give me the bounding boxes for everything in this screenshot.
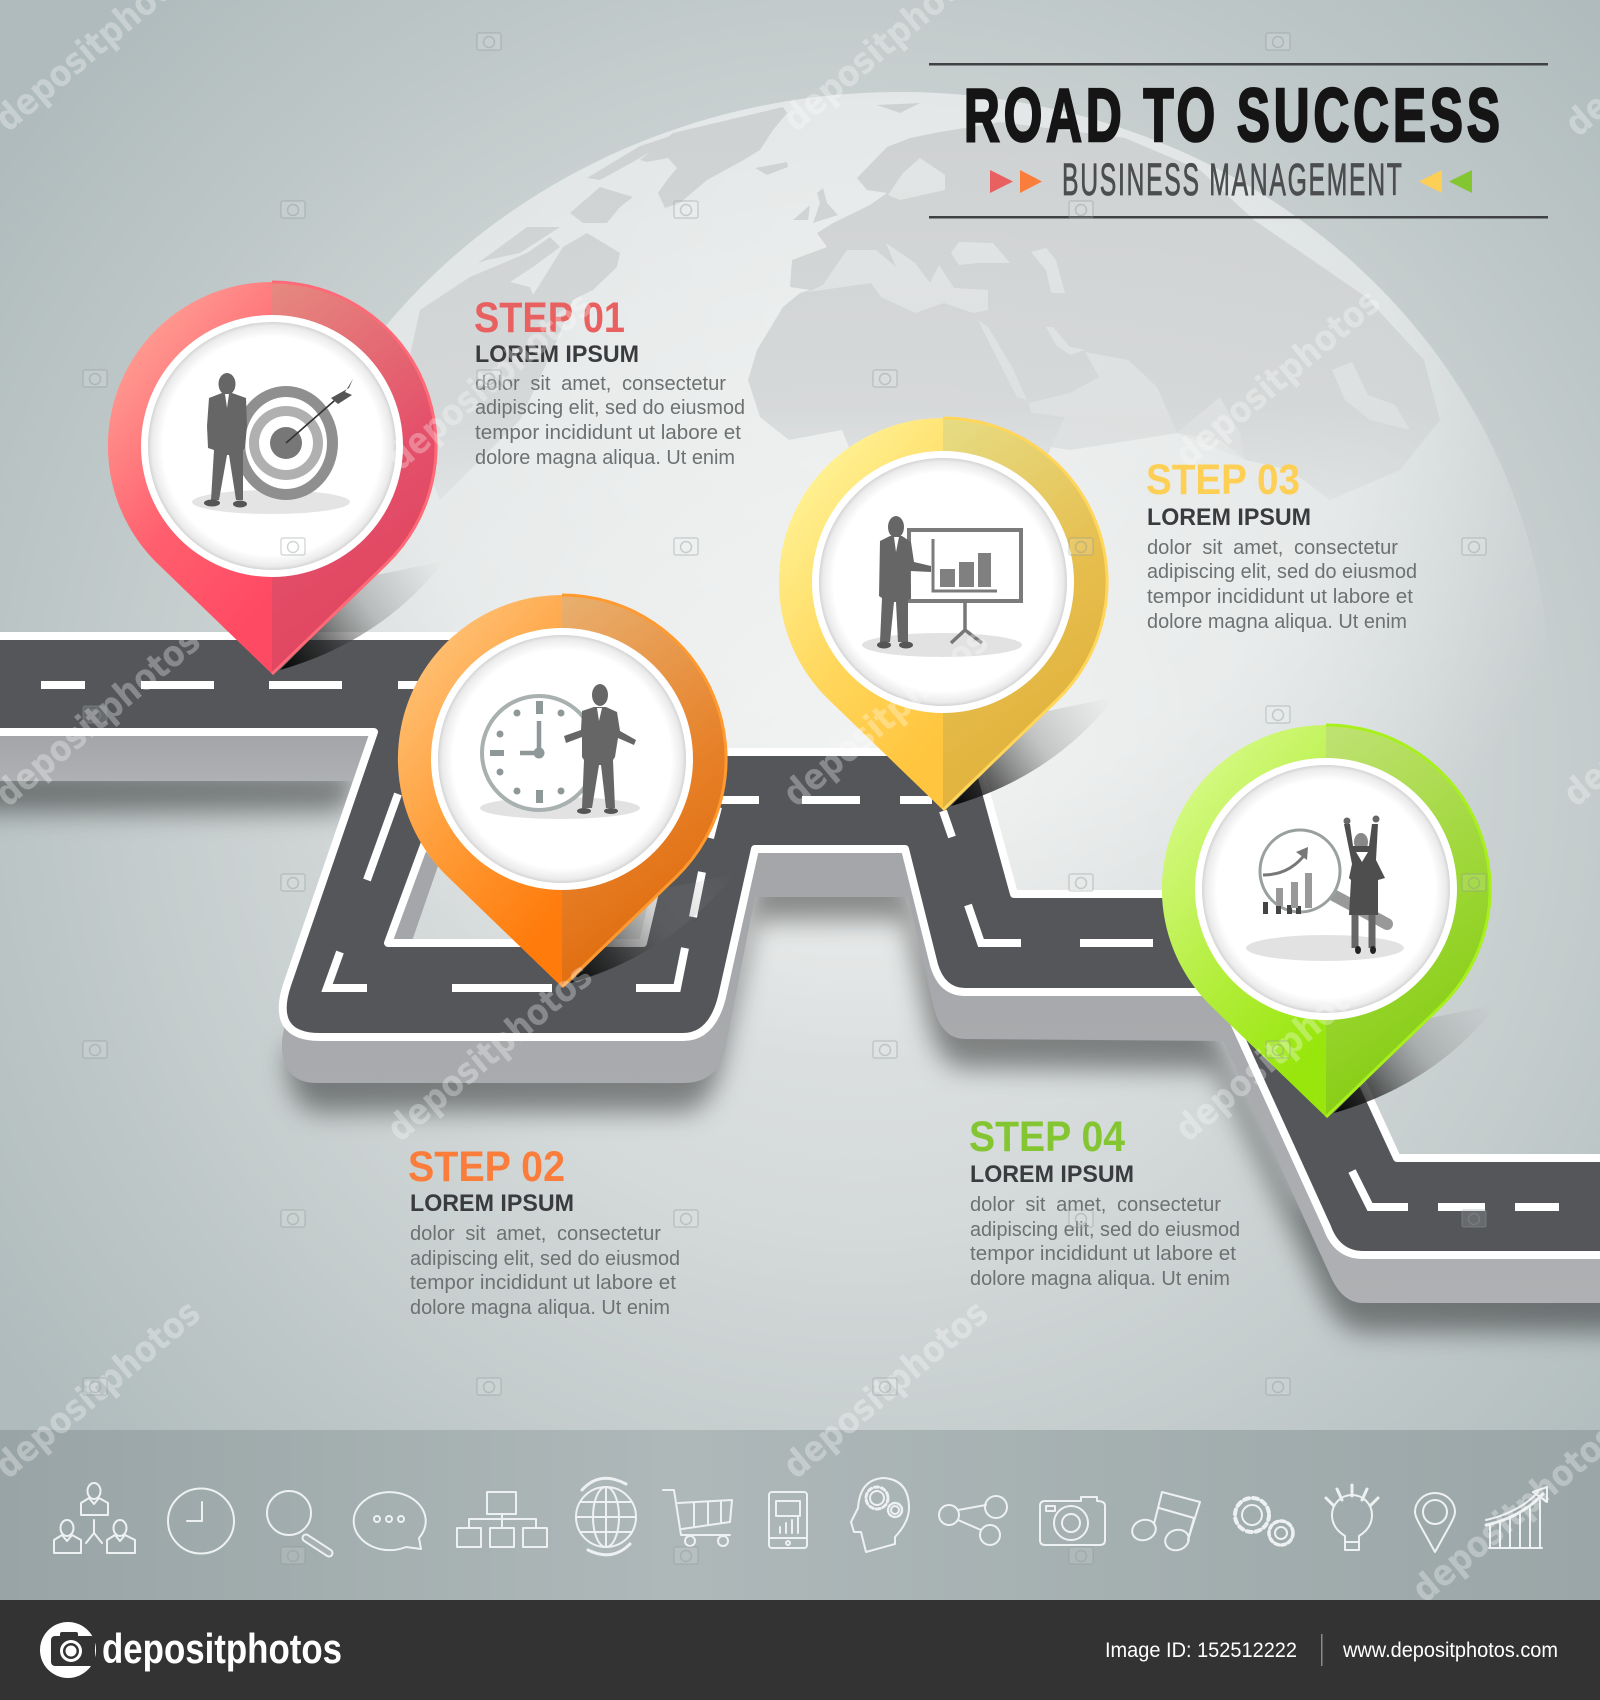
footer logo: depositphotos: [102, 1625, 342, 1672]
step 03 text: tempor incididunt ut labore et: [1147, 586, 1413, 608]
step 01 text: STEP 01: [474, 294, 625, 342]
step 04 text: [969, 1113, 1240, 1290]
road: [0, 636, 1600, 1332]
step 02 text: [408, 1143, 680, 1319]
step 03 text: STEP 03: [1146, 456, 1300, 504]
icon: share: [939, 1496, 1007, 1545]
icon: clock: [168, 1488, 234, 1554]
step 01 text: LOREM IPSUM: [475, 341, 639, 368]
lane markings: [41, 685, 1559, 1207]
continents: [400, 103, 1440, 560]
step 04 text: dolor sit amet, consectetur: [970, 1194, 1221, 1216]
title block: [929, 63, 1548, 218]
road drop shadow: [0, 770, 1600, 1332]
step 02 text: dolore magna aliqua. Ut enim: [410, 1297, 670, 1319]
step 04 text: adipiscing elit, sed do eiusmod: [970, 1219, 1240, 1241]
step 04 text: STEP 04: [969, 1113, 1125, 1161]
footer logo: [40, 1622, 342, 1678]
step 03 text: dolore magna aliqua. Ut enim: [1147, 611, 1407, 633]
icon: team: [54, 1483, 135, 1553]
website: www.depositphotos.com: [1342, 1639, 1558, 1662]
icon: woman with magnified chart: [1246, 816, 1404, 961]
icon: globe: [576, 1478, 636, 1555]
pin 2: orange, clock: [398, 595, 734, 987]
step 02 text: LOREM IPSUM: [410, 1190, 574, 1217]
step 02 text: STEP 02: [408, 1143, 565, 1191]
watermarks: depositphotos: [775, 1292, 996, 1487]
pin body: [108, 282, 436, 674]
step 03 text: [1146, 456, 1417, 633]
icon: speech bubble: [354, 1492, 426, 1550]
step 02 text: tempor incididunt ut labore et: [410, 1272, 676, 1294]
pin 1: red, target: [108, 282, 444, 674]
step 03 text: adipiscing elit, sed do eiusmod: [1147, 561, 1417, 583]
watermarks: depositphotos: [379, 284, 600, 479]
world globe: [250, 92, 1550, 1296]
pin 3: yellow, presentation: [779, 418, 1115, 810]
icon: cart: [663, 1490, 732, 1546]
road inner wall: [392, 848, 438, 941]
icon: growth chart: [1486, 1487, 1547, 1548]
step 02 text: adipiscing elit, sed do eiusmod: [410, 1248, 680, 1270]
step 04 text: LOREM IPSUM: [970, 1161, 1134, 1188]
subtitle: BUSINESS MANAGEMENT: [1062, 154, 1402, 205]
pin shadow: [570, 874, 734, 983]
footer bar: [0, 1600, 1600, 1700]
image id: Image ID: 152512222: [1105, 1639, 1297, 1662]
road side wall: [0, 732, 374, 781]
step 01 text: adipiscing elit, sed do eiusmod: [475, 397, 745, 419]
bottom icon band: [0, 1430, 1600, 1600]
icon: music: [1129, 1492, 1200, 1554]
step 03 text: LOREM IPSUM: [1147, 504, 1311, 531]
watermarks: depositphotos: [775, 620, 996, 815]
icon: man with chart board: [862, 516, 1022, 657]
watermarks: depositphotos: [379, 955, 600, 1150]
pin body: [779, 418, 1107, 810]
step 04 text: tempor incididunt ut labore et: [970, 1243, 1236, 1265]
watermarks: depositphotos: [1167, 281, 1388, 476]
road surface: [0, 636, 1600, 1255]
icon: tablet: [769, 1492, 807, 1548]
watermarks: depositphotos: [1167, 955, 1388, 1150]
icon: light bulb: [1326, 1485, 1378, 1550]
pin body: [398, 595, 726, 987]
title: ROAD TO SUCCESS: [964, 74, 1500, 158]
step 01 text: dolore magna aliqua. Ut enim: [475, 447, 735, 469]
step 04 text: dolore magna aliqua. Ut enim: [970, 1268, 1230, 1290]
icon: man with clock: [480, 684, 640, 819]
icon: head with gears: [851, 1478, 909, 1552]
icon: man with target: [192, 373, 353, 514]
step 01 text: dolor sit amet, consectetur: [475, 373, 726, 395]
seas: [808, 158, 1410, 460]
step 01 text: [474, 294, 745, 469]
step 01 text: tempor incididunt ut labore et: [475, 422, 741, 444]
icon: search: [267, 1491, 329, 1553]
step 03 text: dolor sit amet, consectetur: [1147, 537, 1398, 559]
pin shadow: [951, 697, 1115, 806]
pin 4: green, growth: [1162, 725, 1498, 1117]
pin shadow: [1334, 1004, 1498, 1113]
icon: org chart: [457, 1492, 547, 1547]
icon: gears: [1235, 1498, 1293, 1545]
icon: location pin: [1415, 1493, 1455, 1552]
step 02 text: dolor sit amet, consectetur: [410, 1223, 661, 1245]
arrows: [990, 170, 1472, 193]
icon: camera: [1040, 1497, 1105, 1545]
pin body: [1162, 725, 1490, 1117]
pin shadow: [280, 561, 444, 670]
